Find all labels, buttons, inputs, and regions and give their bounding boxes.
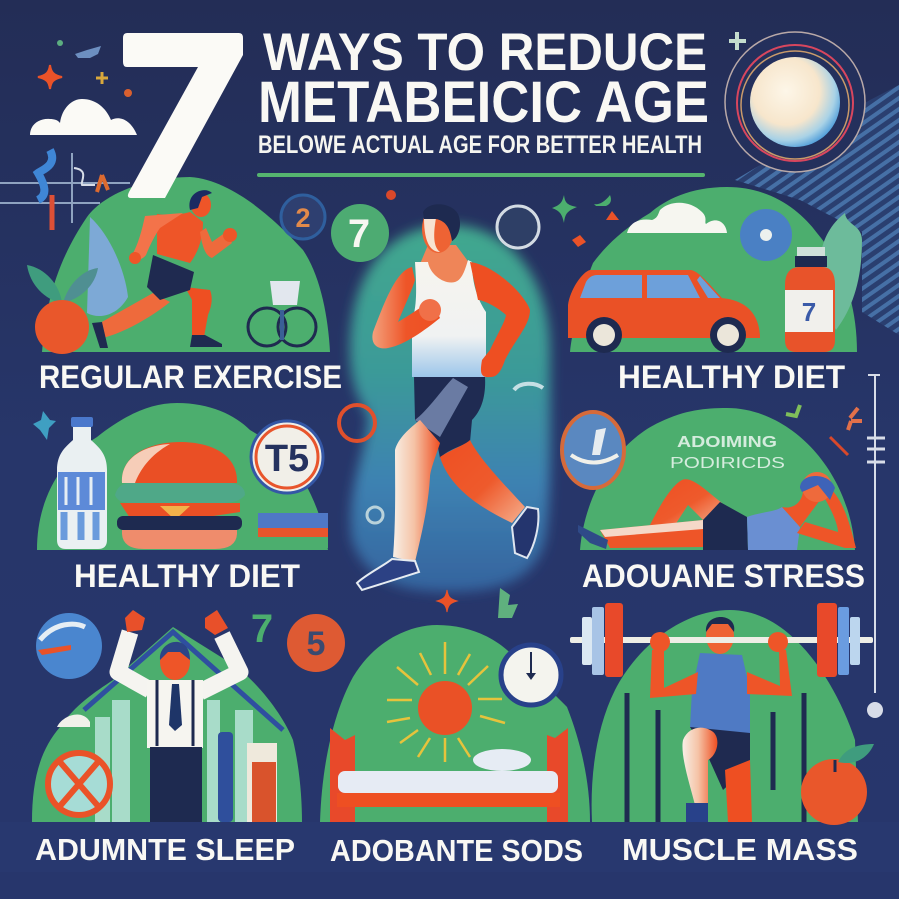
icon: glass	[247, 743, 277, 822]
title numeral 7	[123, 33, 243, 198]
panel: healthy diet top right	[568, 187, 862, 353]
icon: number badge	[251, 421, 323, 493]
icon: no sign	[48, 753, 110, 815]
icon: sun	[387, 642, 505, 762]
back arm	[372, 267, 440, 348]
icon: globe top right	[725, 32, 865, 172]
icon: ball top left	[36, 613, 102, 679]
badges and sparkles top centre: 2	[295, 203, 311, 233]
icon: blue leaf	[87, 217, 128, 316]
icon: man arms raised	[118, 610, 240, 822]
icon: number badge: T5	[265, 438, 309, 480]
icon: dna strand and lines	[0, 150, 130, 230]
ring top centre	[497, 206, 539, 248]
title	[258, 23, 709, 135]
icon: ball	[740, 209, 792, 261]
icon: teal star left	[33, 411, 56, 440]
front leg	[393, 420, 440, 562]
icon: bowl	[562, 412, 624, 488]
icon: house	[57, 632, 283, 822]
panel: adequate sods centre	[320, 625, 590, 822]
divider bar	[257, 173, 705, 177]
panel: healthy diet left	[37, 403, 328, 550]
text: abdomen words	[670, 434, 785, 472]
singlet	[412, 260, 486, 377]
icon: supplement bottle	[785, 247, 835, 352]
icon: bicycle with basket	[248, 281, 316, 346]
title: METABEICIC AGE	[258, 70, 709, 135]
number badge 7: 7	[348, 212, 370, 256]
title: WAYS TO REDUCE	[263, 23, 707, 82]
icon: orange fruit	[801, 744, 874, 825]
front shoe	[357, 559, 419, 590]
icon: red sparkle	[38, 65, 62, 89]
label: adouane stress: ADOUANE STRESS	[582, 558, 865, 594]
icon: barbell	[570, 603, 873, 677]
shorts highlight	[415, 378, 468, 437]
icon: supplement bottle: 7	[802, 297, 816, 327]
neck	[420, 245, 470, 285]
icon: reclining person	[578, 472, 856, 550]
panel: muscle mass	[570, 603, 874, 825]
icon: leaf	[819, 213, 862, 330]
icon: red ring	[339, 405, 375, 441]
label: healthy diet left: HEALTHY DIET	[74, 558, 300, 594]
icon: cloud top left	[30, 99, 137, 135]
shorts	[414, 377, 485, 458]
head	[422, 204, 460, 253]
label: regular exercise: REGULAR EXERCISE	[39, 359, 342, 395]
icon: stacked books	[258, 513, 328, 548]
number badge 7	[331, 204, 389, 262]
central runner figure	[357, 204, 538, 590]
label: healthy diet top right: HEALTHY DIET	[618, 359, 845, 395]
icon: hands	[650, 632, 788, 652]
label: muscle mass: MUSCLE MASS	[622, 832, 858, 867]
panel: stress right	[562, 408, 856, 550]
icon: cloud	[627, 203, 727, 233]
panel: regular exercise	[27, 177, 330, 354]
icon: small decorations	[57, 40, 132, 97]
icon: clock	[501, 645, 561, 705]
panel: adequate sleep left	[32, 610, 302, 822]
icon: poles	[627, 693, 804, 822]
icon: runner	[92, 190, 237, 348]
small sparkles right	[786, 405, 862, 455]
icon: green number 7: 7	[251, 607, 273, 651]
icon: small sparkles centre	[367, 384, 543, 618]
icon: red ball with 5: 5	[307, 625, 325, 663]
icon: water bottle	[57, 417, 107, 549]
front arm	[470, 262, 530, 377]
icon: bed	[330, 728, 568, 822]
central glow arch	[350, 225, 550, 592]
icon: burger	[115, 442, 245, 549]
icon: plus near globe	[729, 32, 746, 50]
scale line right	[867, 375, 885, 718]
text: abdomen words: PODIRICDS	[670, 455, 785, 472]
icon: orange with leaves	[27, 265, 98, 354]
icon: lifter	[650, 617, 792, 822]
subtitle: BELOWE ACTUAL AGE FOR BETTER HEALTH	[258, 131, 702, 159]
hand	[419, 299, 441, 321]
back leg	[440, 440, 525, 523]
icon: red ball with 5	[287, 614, 345, 672]
icon: car	[568, 270, 760, 353]
back shoe	[512, 507, 538, 558]
label: adequate sods: ADOBANTE SODS	[330, 833, 583, 868]
label: adequate sleep: ADUMNTE SLEEP	[35, 832, 295, 867]
badges and sparkles top centre	[281, 190, 619, 247]
text: abdomen words: ADOIMING	[677, 434, 777, 451]
